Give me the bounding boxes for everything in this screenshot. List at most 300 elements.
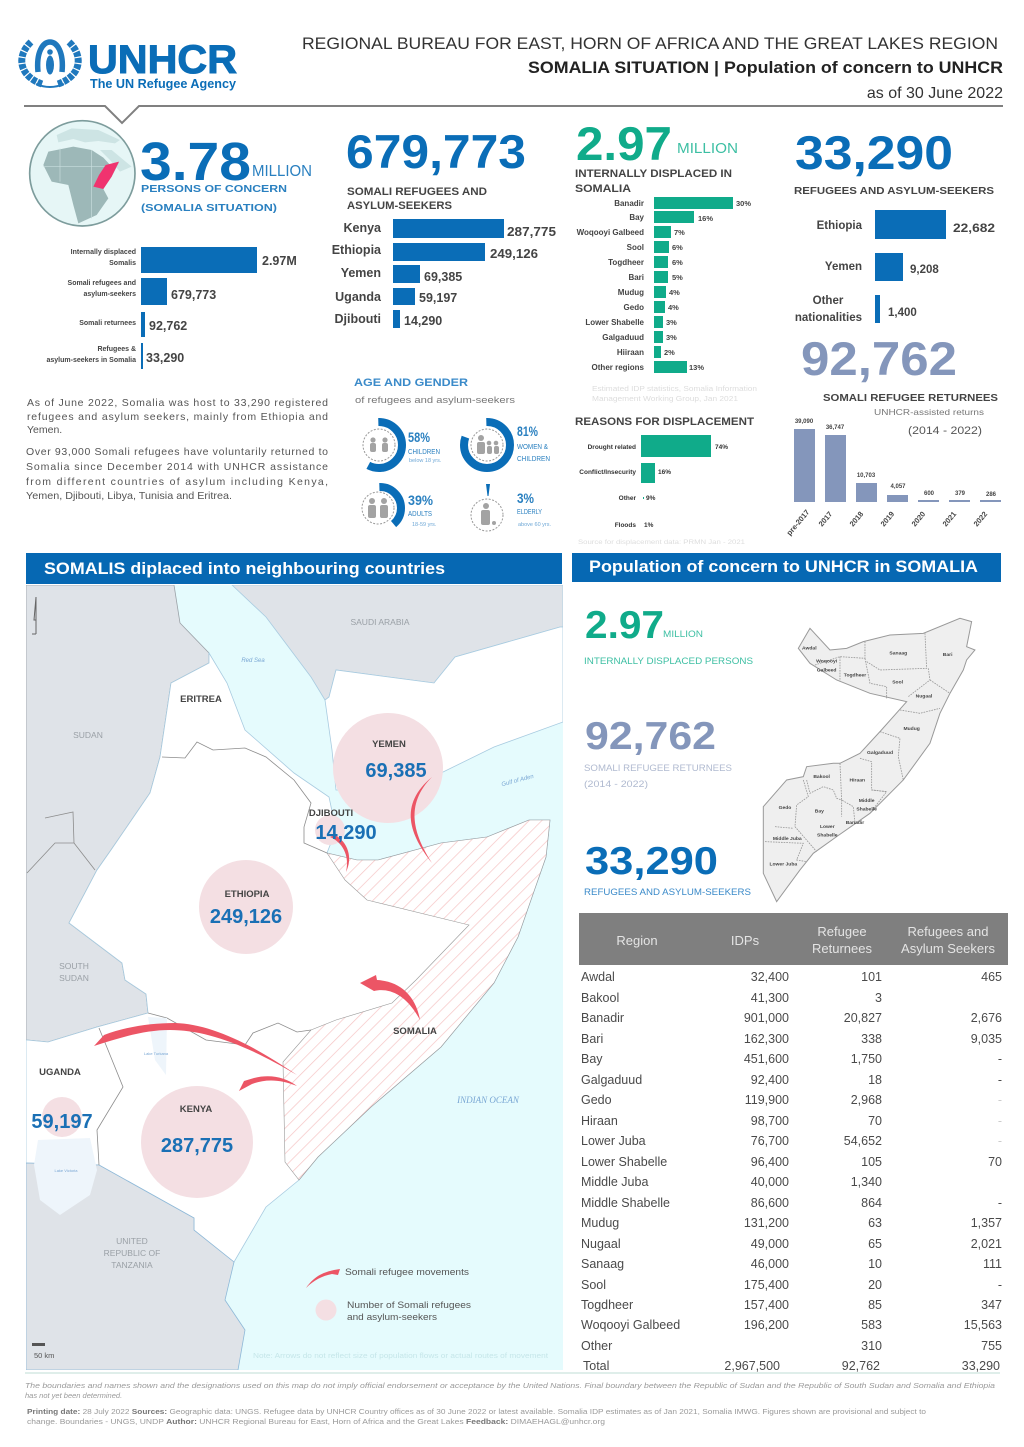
table column: refugees and asylum seekers: - [998,1134,1002,1148]
table column: refugee returnees: 105 [861,1155,882,1169]
heading line 2: ASYLUM-SEEKERS [347,200,452,212]
table column: refugee returnees: 338 [861,1032,882,1046]
logo: UNHCR [22,38,237,91]
donut: children 58% [356,422,442,468]
bar chart: IDPs by region: Woqooyi Galbeed [577,228,644,237]
disclaimer [25,1381,995,1400]
arrow: to Uganda [94,1023,297,1075]
map labels: ETHIOPIA [225,889,270,900]
map: regions of Somalia: Gedo [779,805,791,811]
bar chart: population groups: 92,762 [149,319,187,333]
table column: refugee returnees: 70 [868,1114,882,1128]
heading: SOMALI REFUGEES AND [347,186,487,198]
panel: persons of concern [46,132,312,369]
table column: refugee returnees: 20 [868,1278,882,1292]
bar chart: IDPs by region: Galgaduud [602,333,644,342]
table column: refugee returnees: 2,968 [851,1093,882,1107]
table column: regions: Lower Juba [581,1134,646,1148]
map labels: SOMALIA [393,1026,437,1037]
bar chart: IDPs by region: 16% [698,214,713,223]
map labels [31,617,535,1270]
bar chart: IDPs by region: Togdheer [608,258,644,267]
donut: elderly 3%: above 60 yrs. [518,522,551,528]
heading: AGE AND GENDER [354,377,468,389]
table column: IDPs: 92,400 [751,1073,789,1087]
lake Victoria [34,1138,97,1215]
table header [579,913,1008,965]
table column: IDPs: 98,700 [751,1114,789,1128]
million: MILLION [677,140,738,157]
legend [306,1267,472,1322]
bar chart: reasons: 16% [658,469,671,476]
circle: Uganda [42,1097,82,1137]
map: regions of Somalia: Sool [892,680,904,686]
text block: narrative: As of June 2022, Somalia was host to 33,290 registered [27,397,328,409]
text block: narrative: refugees and asylum seekers, mainly from Ethiopia and [27,411,328,423]
table column: regions: Other [581,1339,612,1353]
bar chart: nationalities: 22,682 [953,223,995,235]
source note [592,386,757,403]
logo tagline: The UN Refugee Agency [90,76,237,91]
bar chart: IDPs by region: 4% [669,288,680,297]
bar chart: countries of asylum: Kenya [343,221,382,235]
map note: Note: Arrows do not reflect size of population flows or actual routes of movement [253,1351,549,1360]
bar chart: population groups: 33,290 [146,351,184,365]
source note: Source for displacement data: PRMN Jan - 2021 [578,540,746,546]
big number 3.78: 3.78 [140,132,251,192]
table column: regions: Hiraan [581,1114,618,1128]
subtitle 2: (SOMALIA SITUATION) [141,202,277,214]
date: as of 30 June 2022 [867,85,1003,102]
bar chart: returnees by year: 10,703 [857,473,876,479]
heading line 2: SOMALIA [575,183,631,195]
donut: women and children 81% [464,422,550,468]
table column: regions: Bari [581,1032,603,1046]
circle: Ethiopia [199,860,293,954]
panel: refugees and asylum-seekers in Somalia [794,126,995,324]
bar chart: population groups: asylum-seekers in Somalia [46,357,136,364]
bar chart: returnees by year: 36,747 [826,425,845,431]
donut: elderly 3% [471,484,551,531]
subheading: of refugees and asylum-seekers [355,395,515,406]
table column: refugee returnees: 54,652 [844,1134,882,1148]
table: population by region [579,913,1008,1373]
bar chart: returnees by year: 2021 [941,510,958,528]
table column: IDPs: 76,700 [751,1134,789,1148]
bar chart: countries of asylum: 14,290 [404,314,442,328]
returnee figure: 92,762 [585,715,716,758]
map: regions of Somalia: Galgaduud [867,750,893,756]
map: regions of Somalia: Lower Juba [769,862,797,868]
IDP figure: 2.97 [585,604,664,647]
bar chart: reasons: 9% [646,495,656,502]
map: regions of Somalia: Middle [859,798,875,804]
bar chart: population groups: asylum-seekers [83,291,136,298]
bar chart: returnees by year: 379 [955,491,966,497]
map labels: SOUTH [59,961,89,971]
map: regions of Somalia: Awdal [802,645,817,651]
bar chart: nationalities: nationalities [795,312,862,324]
bar chart: reasons: 1% [644,522,654,529]
bar chart: nationalities [795,210,995,324]
bar chart: returnees by year: pre-2017 [785,508,811,537]
table column: regions: Banadir [581,1011,624,1025]
IDP label: INTERNALLY DISPLACED PERSONS [584,656,753,667]
arrow: to Ethiopia [360,975,420,1020]
bar chart: IDPs by region: Banadir [614,199,644,208]
million: MILLION [252,163,312,180]
bar chart: IDPs by region: 4% [668,303,679,312]
icon: laurel and sheltering hands [22,42,78,87]
table column: refugees and asylum seekers: 9,035 [971,1032,1002,1046]
scale bar: 50 km [34,1351,54,1360]
bar chart: returnees by year [785,419,1001,537]
bar chart: IDPs by region: 13% [689,363,704,372]
table column: IDPs: 96,400 [751,1155,789,1169]
table column: refugees and asylum seekers: - [998,1073,1002,1087]
bar chart: reasons: Conflict/Insecurity [579,469,636,476]
donut: women and children 81%: CHILDREN [517,456,550,463]
title block [302,34,1003,102]
bar chart: reasons: 74% [715,444,728,451]
disclaimer: has not yet been determined. [25,1391,122,1400]
heading: SOMALI REFUGEE RETURNEES [823,392,998,404]
donut: elderly 3%: ELDERLY [517,509,542,516]
map: regions of Somalia: Middle Juba [773,836,802,842]
logo wordmark: UNHCR [88,38,237,82]
map labels: TANZANIA [111,1260,153,1270]
donut: adults 39%: ADULTS [408,511,432,518]
table header: Asylum Seekers [901,941,995,956]
table column: regions: Mudug [581,1216,619,1230]
table column: IDPs: 451,600 [744,1052,789,1066]
table column: regions: Woqooyi Galbeed [581,1318,680,1332]
table column: refugee returnees: 92,762 [842,1359,880,1373]
subheading: UNHCR-assisted returns [874,407,984,417]
table column: IDPs: 175,400 [744,1278,789,1292]
big number 679,773: 679,773 [346,125,526,178]
table column: refugees and asylum seekers [962,970,1002,1373]
bar chart: returnees by year: 286 [986,492,997,498]
table column: regions: Nugaal [581,1237,621,1251]
bar chart: IDPs by region: Mudug [618,288,644,297]
bar chart: IDPs by region: 3% [666,333,677,342]
bar chart: population groups [46,247,297,369]
table column: refugees and asylum seekers: - [998,1093,1002,1107]
bar chart: IDPs by region: Other regions [592,363,645,372]
bar chart: IDPs by region: 6% [672,243,683,252]
table column: IDPs: 131,200 [744,1216,789,1230]
map labels: Lake Turkana [144,1051,169,1056]
bar chart: population groups: 2.97M [262,254,297,268]
big number 2.97: 2.97 [576,117,672,170]
footer: disclaimer and credits [25,1381,995,1426]
bar chart: IDPs by region: 30% [736,199,751,208]
bar chart: returnees by year: 39,090 [795,419,814,425]
map labels: UGANDA [39,1067,81,1078]
title line 2: SOMALIA SITUATION | Population of concern to UNHCR [528,58,1003,77]
table column: refugee returnees: 1,340 [851,1175,882,1189]
bar chart: returnees by year: 2019 [879,510,896,528]
bar chart: reasons: Floods [615,522,636,529]
big number 33,290: 33,290 [795,126,953,179]
donut: children 58%: 58% [408,429,430,445]
map labels: ERITREA [180,694,222,705]
bar chart: countries of asylum: Uganda [335,290,382,304]
table column: refugees and asylum seekers: 15,563 [964,1318,1002,1332]
lake Turkana [148,1017,167,1075]
table column: regions: Lower Shabelle [581,1155,667,1169]
table column: refugees and asylum seekers: - [998,1196,1002,1210]
map labels: SUDAN [59,973,89,983]
map labels: DJIBOUTI [309,808,353,819]
map: regions of Somalia [763,618,975,902]
source note: Management Working Group, Jan 2021 [592,396,738,403]
table column: refugee returnees: 101 [861,970,882,984]
map labels: 14,290 [315,822,377,844]
million label: MILLION [663,629,703,639]
map labels: Gulf of Aden [501,774,535,788]
map: regions of Somalia: Nugaal [916,693,933,699]
scale bar [32,1343,54,1358]
table column: IDPs: 49,000 [751,1237,789,1251]
table column: regions: Sool [581,1278,606,1292]
bar chart: IDPs by region: Sool [627,243,644,252]
banner: Somalis displaced [26,553,562,584]
table column: refugee returnees [842,970,882,1373]
map labels: SUDAN [73,730,103,740]
map labels: UNITED [116,1236,148,1246]
bar chart: IDPs by region: 3% [666,318,677,327]
bar chart: IDPs by region: 2% [664,348,675,357]
table header: Refugees and [908,924,988,939]
table column: regions: Total [583,1359,609,1373]
banner: population of concern in Somalia [572,553,1001,582]
bar chart: nationalities: Other [813,295,844,307]
table column: regions: Awdal [581,970,615,984]
bar chart: returnees by year: 2020 [910,510,927,528]
map labels: 69,385 [365,760,427,782]
refugee figure: 33,290 [585,840,718,883]
panel: reasons for displacement [575,416,754,546]
table column: refugees and asylum seekers: 2,676 [971,1011,1002,1025]
title line 1: REGIONAL BUREAU FOR EAST, HORN OF AFRICA AND THE GREAT LAKES REGION [302,34,998,53]
legend: Somali refugee movements [345,1267,470,1277]
table column: IDPs: 901,000 [744,1011,789,1025]
map: regions of Somalia: Bay [815,809,824,815]
bar chart: countries of asylum [332,219,556,328]
table column: IDPs [724,970,789,1373]
bar chart: IDPs by region: Bari [628,273,644,282]
table column: regions: Middle Shabelle [581,1196,670,1210]
table column: refugee returnees: 18 [868,1073,882,1087]
table column: regions: Bay [581,1052,603,1066]
map: regions of Somalia: Shabelle [856,807,877,813]
bar chart: IDPs by region: Gedo [624,303,644,312]
table column: IDPs: 162,300 [744,1032,789,1046]
map: displacement into neighbouring countries [26,585,563,1370]
arrow: to Kenya [239,1076,297,1091]
bar chart: returnees by year: 2018 [848,510,865,528]
table column: refugees and asylum seekers: 465 [981,970,1002,984]
table column: refugee returnees: 63 [868,1216,882,1230]
legend: Number of Somali refugees [347,1300,472,1310]
icon: globe with Somalia situation highlighted [30,121,135,226]
table column: refugee returnees: 583 [861,1318,882,1332]
map: regions of Somalia: Sanaag [889,651,907,657]
table column: refugees and asylum seekers: 70 [988,1155,1002,1169]
map: regions of Somalia: Togdheer [844,673,866,679]
map labels: 59,197 [31,1111,93,1133]
table header: Region [616,933,658,948]
bar chart: population groups: 679,773 [171,288,216,302]
table column: regions: Middle Juba [581,1175,648,1189]
panel: Somalia key figures [584,604,753,898]
panel: Somali refugees and asylum-seekers [332,125,556,328]
land: Arabian peninsula [232,585,563,700]
legend: and asylum-seekers [347,1312,438,1322]
map: regions of Somalia: Shabelle [817,833,838,839]
bar chart: IDPs by region: 5% [672,273,683,282]
table column: refugee returnees: 20,827 [844,1011,882,1025]
map labels: SAUDI ARABIA [350,617,410,627]
bar chart: countries of asylum: 287,775 [507,225,556,239]
table header: IDPs [731,933,760,948]
map labels: INDIAN OCEAN [456,1095,520,1105]
circle: Kenya [141,1086,253,1198]
map: regions of Somalia: Woqooyi [816,659,838,665]
table column: refugee returnees: 864 [861,1196,882,1210]
bar chart: IDPs by region [577,197,751,373]
returnee label: SOMALI REFUGEE RETURNEES [584,763,732,774]
disclaimer: The boundaries and names shown and the designations used on this map do not imply official endorsement or acceptance by the United Nations. Final boundary between the Republic of Sudan and the Republic of South Sudan and Somalia and Ethiopia [25,1381,995,1390]
bar chart: population groups: Somali returnees [79,320,136,327]
land: Sudan and South Sudan [26,585,209,1042]
heading: REFUGEES AND ASYLUM-SEEKERS [794,185,994,197]
bar chart: IDPs by region: Hiiraan [617,348,644,357]
bar chart: reasons: Drought related [588,444,636,451]
panel: age and gender [354,377,551,531]
bar chart: IDPs by region: Bay [629,213,645,222]
map labels: 287,775 [161,1135,233,1157]
table column: IDPs: 41,300 [751,991,789,1005]
credits [27,1407,926,1426]
bar chart: population groups: Somali refugees and [68,280,136,287]
table column: refugees and asylum seekers: - [998,1278,1002,1292]
subtitle: PERSONS OF CONCERN [141,183,287,195]
bar chart: nationalities: 9,208 [910,264,939,276]
bar chart: countries of asylum: Ethiopia [332,243,382,257]
donut: children 58%: CHILDREN [408,449,440,456]
bar chart: nationalities: Ethiopia [817,220,863,232]
table column: IDPs: 40,000 [751,1175,789,1189]
map labels: Lake Victoria [54,1168,78,1173]
table column: refugee returnees: 85 [868,1298,882,1312]
bar chart: returnees by year: 4,057 [890,484,906,490]
bar chart: population groups: Somalis [109,260,136,267]
map labels: 249,126 [210,906,282,928]
bar chart: returnees by year: 600 [924,491,935,497]
donut: elderly 3%: 3% [517,490,534,506]
circle: Yemen [333,713,443,823]
map: regions of Somalia: Bakool [813,774,831,780]
period: (2014 - 2022) [908,425,982,437]
table column: refugees and asylum seekers: 2,021 [971,1237,1002,1251]
text block: narrative [26,397,328,502]
text block: narrative: from different countries of asylum including Kenya, [26,476,328,488]
table column: regions: Galgaduud [581,1073,642,1087]
land: Eritrea, Ethiopia, Djibouti, Kenya, Uganda [26,653,550,1262]
donut: adults 39%: 18-59 yrs. [412,522,437,528]
map labels: YEMEN [372,739,406,750]
table column: refugee returnees: 65 [868,1237,882,1251]
table column: regions: Togdheer [581,1298,633,1312]
bar chart: population groups: Refugees & [97,346,136,353]
table header: Refugee [817,924,867,939]
bar chart: countries of asylum: Djibouti [334,312,381,326]
bar chart: nationalities: 1,400 [888,307,917,319]
land: Yemen [325,627,563,790]
map: regions of Somalia: Hiraan [850,777,865,783]
text block: narrative: Yemen, Djibouti, Libya, Tunisia and Eritrea. [26,490,232,502]
legend arrow [306,1269,340,1288]
bar chart: countries of asylum: 249,126 [490,247,538,261]
bar chart: returnees by year: 2017 [817,510,834,528]
banner: population of concern in Somalia: Population of concern to UNHCR in SOMALIA [589,557,978,576]
map: regions of Somalia: Mudug [903,726,920,732]
bar chart: reasons: Other [619,495,636,502]
table column: refugees and asylum seekers: 755 [981,1339,1002,1353]
bar chart: IDPs by region: Lower Shabelle [585,318,645,327]
table column: refugee returnees: 10 [868,1257,882,1271]
land: Tanzania [26,1163,245,1370]
map labels: Red Sea [241,658,265,664]
table column: regions: Gedo [581,1093,612,1107]
table column: IDPs: 157,400 [744,1298,789,1312]
donut: adults 39%: 39% [408,492,433,508]
source note: Estimated IDP statistics, Somalia Information [592,386,757,393]
heading: INTERNALLY DISPLACED IN [575,168,732,180]
table header: Returnees [812,941,872,956]
table column: IDPs: 2,967,500 [724,1359,780,1373]
heading: REASONS FOR DISPLACEMENT [575,416,754,428]
returnee period: (2014 - 2022) [584,779,648,790]
map: regions of Somalia: Banadir [846,820,864,826]
table column: refugees and asylum seekers: 1,357 [971,1216,1002,1230]
north arrow [32,597,36,634]
text block: narrative: Yemen. [27,424,62,436]
bar chart: countries of asylum: 59,197 [419,291,457,305]
table column: regions: Bakool [581,991,619,1005]
donut: women and children 81%: 81% [517,423,538,439]
arrow: to Djibouti [330,835,349,872]
table column: regions: Sanaag [581,1257,624,1271]
bar chart: nationalities: Yemen [825,261,862,273]
donut: women and children 81%: WOMEN & [517,444,548,451]
credits: change. Boundaries - UNGS, UNDP Author: UNHCR Regional Bureau for East, Horn of Africa and the Great Lakes Feedback: DIMAEHAGL@unhcr.org [27,1417,605,1426]
big number 92,762: 92,762 [801,332,957,385]
table column: IDPs: 119,900 [745,1093,789,1107]
text block: narrative: Over 93,000 Somali refugees have voluntarily returned to [26,446,328,458]
table column: IDPs: 86,600 [751,1196,789,1210]
map: regions of Somalia: Galbeed [817,668,836,674]
text block: narrative: Somalia since December 2014 with UNHCR assistance [26,461,328,473]
map: regions of Somalia: Lower [820,824,835,830]
table column: refugees and asylum seekers: 347 [981,1298,1002,1312]
table column: IDPs: 32,400 [751,970,789,984]
map labels: KENYA [180,1104,212,1115]
land: Somalia hatched [283,820,550,1180]
